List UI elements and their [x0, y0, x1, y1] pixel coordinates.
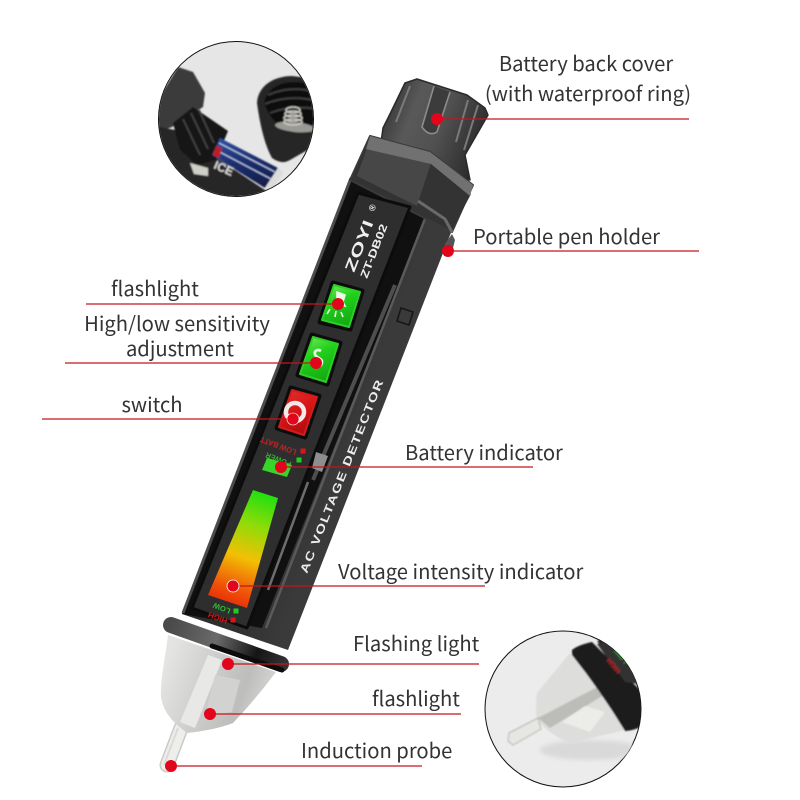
flashlight button — [320, 283, 362, 329]
callout: flashing light — [222, 628, 480, 670]
inset photo: transparent probe tip: HIGH — [606, 656, 623, 674]
level labels: LOW — [211, 600, 232, 616]
callout: battery back cover: (with waterproof ring) — [485, 78, 691, 107]
callout: flashlight lens — [204, 683, 461, 720]
barrel — [182, 178, 452, 650]
light strip — [312, 452, 328, 472]
callout: battery indicator: Battery indicator — [405, 437, 563, 466]
callout: induction probe: Induction probe — [301, 735, 452, 764]
brand text — [342, 203, 390, 280]
inset photo: transparent probe tip: LOW — [613, 647, 630, 664]
brand text: ® — [367, 203, 378, 213]
inset photo: battery compartment — [158, 41, 314, 197]
status labels: POWER — [264, 450, 293, 469]
transparent lens — [161, 635, 276, 733]
inset photo: battery compartment: ICE — [212, 158, 236, 179]
callout: portable pen holder — [442, 221, 699, 257]
level labels: HIGH — [207, 610, 229, 626]
product text: AC VOLTAGE DETECTOR — [299, 377, 387, 575]
callout: switch: switch — [121, 389, 183, 418]
callout: switch — [42, 389, 299, 425]
callout: battery back cover — [431, 48, 691, 125]
window mark — [397, 308, 413, 325]
voltage gradient bar — [208, 490, 278, 608]
callout: flashing light: Flashing light — [353, 628, 480, 657]
status labels — [259, 434, 306, 469]
callout: sensitivity adjustment: adjustment — [126, 333, 234, 362]
inset photo: transparent probe tip — [484, 630, 642, 788]
probe tip — [164, 728, 181, 765]
callout: voltage intensity indicator — [227, 556, 583, 592]
callout: induction probe — [165, 735, 452, 772]
callout: sensitivity adjustment: High/low sensitivity — [84, 308, 270, 337]
battery indicator light — [262, 458, 292, 477]
brand text: ZT-DB02 — [359, 223, 390, 280]
callout: battery indicator — [275, 437, 563, 473]
sensitivity button — [298, 335, 340, 384]
callout: flashlight button — [86, 273, 344, 310]
callout: voltage intensity indicator: Voltage intensity indicator — [338, 556, 583, 585]
front panel — [192, 193, 410, 628]
status labels: LOW BATT — [259, 434, 298, 457]
pen holder clip — [444, 234, 455, 256]
bottom ring — [171, 625, 282, 670]
callout: flashlight button: flashlight — [111, 273, 199, 302]
callout: battery back cover: Battery back cover — [499, 48, 673, 77]
brand text: ZOYI — [342, 218, 377, 274]
callout: portable pen holder: Portable pen holder — [473, 221, 660, 250]
hex collar — [350, 136, 473, 232]
callout: flashlight lens: flashlight — [372, 683, 460, 712]
product: voltage detector pen — [161, 79, 488, 765]
power switch button — [277, 388, 319, 437]
callout: sensitivity adjustment — [65, 308, 322, 369]
level labels — [207, 600, 238, 626]
end cap — [380, 79, 488, 180]
